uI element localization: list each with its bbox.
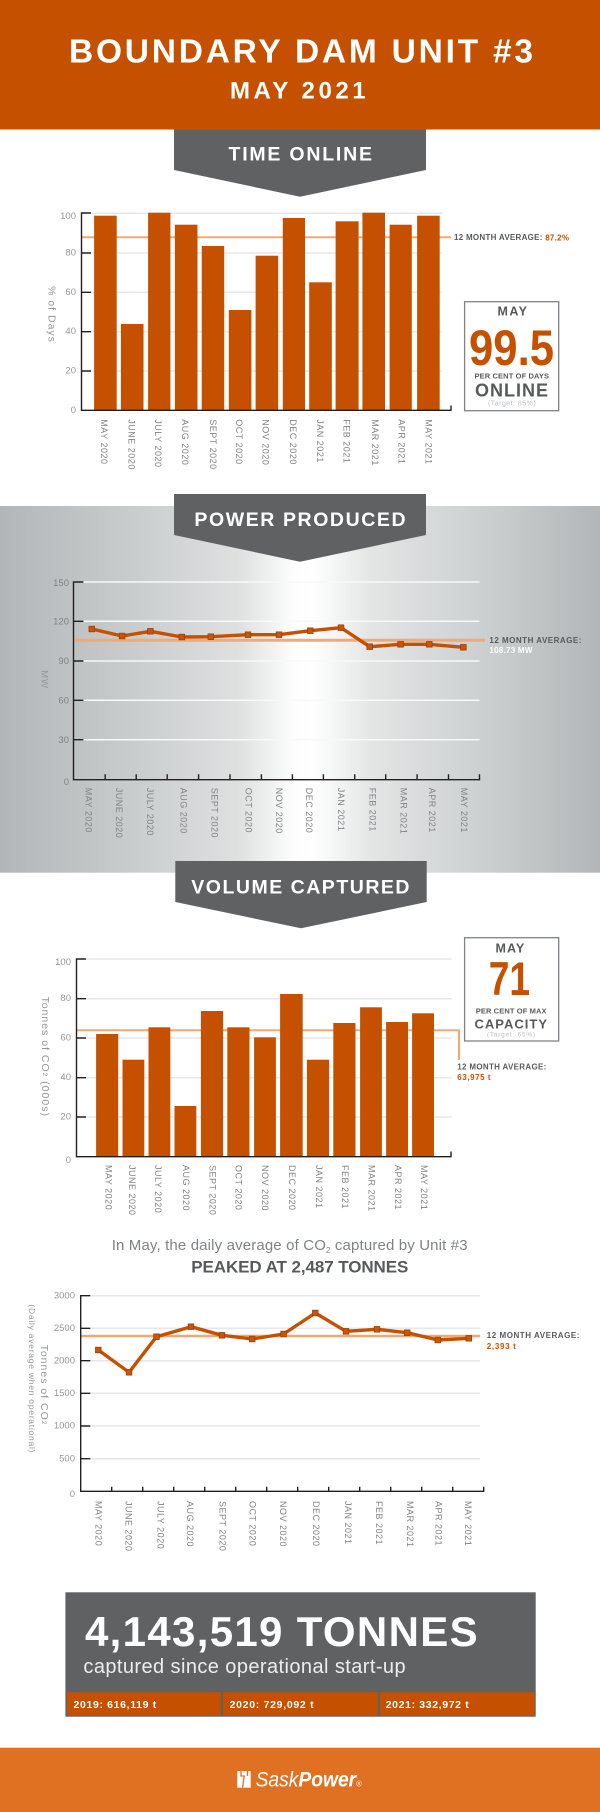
bar chart: time online: 40 <box>65 326 76 337</box>
icon: saskpower logo mark <box>237 1771 251 1788</box>
bar chart: time online: MAY 2020 <box>99 419 109 465</box>
total figure: 4,143,519 TONNES <box>85 1608 478 1655</box>
line chart: daily average captured: MAY 2021 <box>463 1501 473 1546</box>
section heading: power produced: POWER PRODUCED <box>194 509 406 531</box>
text block: daily average peak: captured by Unit #3 <box>331 1237 468 1254</box>
line chart: daily average captured: DEC 2020 <box>311 1501 321 1547</box>
line chart: daily average captured: 2000 <box>54 1356 75 1366</box>
line chart: power produced: NOV 2020 <box>274 788 284 834</box>
line chart: power produced: SEPT 2020 <box>209 788 219 838</box>
bar chart: volume captured: 60 <box>60 1032 71 1044</box>
line chart: power produced: 120 <box>53 616 69 628</box>
line chart: daily average captured: JULY 2020 <box>155 1501 165 1549</box>
section heading: time online <box>174 130 426 197</box>
bar chart: volume captured: AUG 2020 <box>181 1165 191 1211</box>
line chart: power produced: JAN 2021 <box>336 788 346 831</box>
bar chart: volume captured: DEC 2020 <box>287 1165 297 1211</box>
yearly totals strip <box>67 1692 535 1716</box>
line chart: daily average captured: FEB 2021 <box>374 1501 384 1545</box>
bar chart: time online: SEPT 2020 <box>208 419 218 470</box>
bar chart: time online: APR 2021 <box>396 419 406 464</box>
average label: power produced: 12 MONTH AVERAGE: <box>489 636 581 645</box>
line chart: power produced: MAY 2020 <box>83 788 93 833</box>
footer band <box>0 1748 600 1812</box>
panel: total tonnes captured <box>65 1592 536 1717</box>
line chart: power produced: 30 <box>58 735 69 746</box>
bar chart: time online: 20 <box>65 366 76 376</box>
line chart: power produced: MAY 2021 <box>459 788 469 833</box>
line chart: daily average captured: Tonnes of CO 2 <box>38 1345 50 1425</box>
bar chart: volume captured: SEPT 2020 <box>207 1165 217 1215</box>
bar chart: time online: FEB 2021 <box>342 419 352 463</box>
text block: daily average peak: In May, the daily average of CO <box>112 1237 326 1254</box>
header banner <box>0 0 600 130</box>
callout: 71 per cent of max capacity: PER CENT OF MAX <box>476 1006 546 1015</box>
callout: 71 per cent of max capacity: 71 <box>489 952 530 1005</box>
bar chart: time online: 80 <box>65 248 76 258</box>
bar chart: time online: 60 <box>65 287 76 298</box>
line chart: daily average captured: 1000 <box>54 1420 75 1432</box>
bar chart: time online: DEC 2020 <box>288 419 298 465</box>
bar chart: volume captured: Tonnes of CO 2 (000s) <box>39 996 51 1117</box>
bar chart: volume captured: 0 <box>66 1155 71 1166</box>
line chart: power produced: MAR 2021 <box>399 788 409 834</box>
line chart: power produced: DEC 2020 <box>304 788 314 833</box>
yearly totals strip: 2020: 729,092 t <box>230 1699 314 1711</box>
bar chart: volume captured: JAN 2021 <box>314 1165 324 1209</box>
average label: volume captured <box>457 1062 546 1082</box>
bar chart: volume captured: FEB 2021 <box>340 1165 350 1209</box>
line chart: power produced: APR 2021 <box>427 788 437 833</box>
line chart: power produced: MW <box>38 670 50 689</box>
bar chart: volume captured: 100 <box>55 957 71 968</box>
line chart: daily average captured: 2500 <box>54 1323 75 1334</box>
section heading: time online: TIME ONLINE <box>228 144 372 166</box>
bar chart: time online: MAR 2021 <box>370 419 380 466</box>
callout: 99.5 per cent online: (Target: 85%) <box>488 400 536 407</box>
bar chart: volume captured: MAY 2020 <box>103 1165 113 1210</box>
line chart: daily average captured: AUG 2020 <box>185 1501 195 1547</box>
average label: volume captured: 63,975 t <box>457 1073 491 1082</box>
bar chart: volume captured: NOV 2020 <box>260 1165 270 1211</box>
callout: 71 per cent of max capacity: CAPACITY <box>474 1016 547 1031</box>
line chart: daily average captured: MAY 2020 <box>93 1501 103 1546</box>
line chart: daily average captured: OCT 2020 <box>248 1501 258 1546</box>
line chart: power produced: OCT 2020 <box>244 788 254 833</box>
text block: daily average peak: PEAKED AT 2,487 TONNES <box>191 1257 408 1276</box>
logo wordmark: SaskPower® <box>256 1769 362 1792</box>
callout: 99.5 per cent online: MAY <box>498 305 528 319</box>
line chart: power produced: FEB 2021 <box>367 788 377 832</box>
callout: 99.5 per cent online: ONLINE <box>475 381 548 401</box>
bar chart: volume captured: OCT 2020 <box>233 1165 243 1210</box>
bar chart: volume captured: 80 <box>60 993 71 1004</box>
line chart: daily average captured: (Daily average when operational) <box>27 1304 37 1453</box>
line chart: power produced <box>38 578 485 838</box>
line chart: daily average captured <box>27 1290 484 1552</box>
line chart: daily average captured: SEPT 2020 <box>218 1501 228 1551</box>
bar chart: time online <box>46 211 451 470</box>
bar chart: time online: JUNE 2020 <box>126 419 136 470</box>
yearly totals strip: 2021: 332,972 t <box>386 1699 469 1711</box>
average label: time online: 12 MONTH AVERAGE: 87.2% <box>454 233 569 242</box>
line chart: daily average captured: NOV 2020 <box>278 1501 288 1547</box>
subtitle date: MAY 2021 <box>230 77 366 104</box>
callout: 71 per cent of max capacity: MAY <box>496 942 525 956</box>
line chart: power produced: 60 <box>58 696 69 706</box>
text block: daily average peak: 2 <box>326 1246 331 1255</box>
bar chart: volume captured: MAR 2021 <box>367 1165 377 1212</box>
line chart: power produced: 150 <box>53 578 69 589</box>
section heading: power produced <box>174 494 426 562</box>
bar chart: time online: MAY 2021 <box>424 419 434 465</box>
bar chart: volume captured: MAY 2021 <box>419 1165 429 1210</box>
bar chart: time online: NOV 2020 <box>261 419 271 465</box>
line chart: daily average captured: 500 <box>59 1454 75 1464</box>
line chart: power produced: JUNE 2020 <box>114 788 124 838</box>
callout: 71 per cent of max capacity <box>465 938 559 1041</box>
bar chart: volume captured: APR 2021 <box>393 1165 403 1210</box>
bar chart: volume captured <box>39 957 459 1216</box>
bar chart: time online: OCT 2020 <box>234 419 244 465</box>
bar chart: time online: 100 <box>60 211 76 222</box>
line chart: daily average captured: 1500 <box>54 1388 75 1399</box>
line chart: daily average captured: APR 2021 <box>434 1501 444 1546</box>
line chart: daily average captured: MAR 2021 <box>405 1501 415 1548</box>
section heading: volume captured <box>175 861 427 928</box>
average label: volume captured: 12 MONTH AVERAGE: <box>457 1062 546 1072</box>
average label: daily average <box>487 1331 579 1351</box>
bar chart: time online: AUG 2020 <box>180 419 190 465</box>
bar chart: time online: JAN 2021 <box>315 419 325 463</box>
bar chart: time online: JULY 2020 <box>153 419 163 468</box>
bar chart: time online: % of Days <box>46 286 58 343</box>
bar chart: volume captured: JUNE 2020 <box>127 1165 137 1216</box>
line chart: daily average captured: JAN 2021 <box>343 1501 353 1545</box>
section heading: volume captured: VOLUME CAPTURED <box>191 876 410 898</box>
line chart: power produced: 0 <box>64 777 69 788</box>
panel: power produced background <box>0 506 600 873</box>
bar chart: time online: 0 <box>71 405 76 416</box>
line chart: daily average captured: JUNE 2020 <box>124 1501 134 1552</box>
line chart: power produced: JULY 2020 <box>145 788 155 836</box>
average label: power produced <box>489 636 581 655</box>
bar chart: volume captured: JULY 2020 <box>153 1165 163 1213</box>
callout: 99.5 per cent online <box>465 302 559 411</box>
callout: 99.5 per cent online: PER CENT OF DAYS <box>474 371 549 380</box>
line chart: daily average captured: 3000 <box>54 1290 75 1302</box>
text block: daily average peak <box>112 1237 468 1276</box>
average label: power produced: 108.73 MW <box>489 646 533 655</box>
line chart: power produced: AUG 2020 <box>179 788 189 834</box>
average label: daily average: 12 MONTH AVERAGE: <box>487 1331 579 1340</box>
caption: captured since operational start-up <box>83 1656 406 1678</box>
title: BOUNDARY DAM UNIT #3 <box>69 34 533 71</box>
line chart: daily average captured: 0 <box>70 1489 75 1500</box>
average label: daily average: 2,393 t <box>487 1342 516 1351</box>
bar chart: volume captured: 40 <box>60 1072 71 1083</box>
callout: 71 per cent of max capacity: (Target: 65%) <box>487 1032 535 1038</box>
bar chart: volume captured: 20 <box>60 1112 71 1122</box>
callout: 99.5 per cent online: 99.5 <box>469 320 554 376</box>
yearly totals strip: 2019: 616,119 t <box>74 1699 157 1711</box>
line chart: power produced: 90 <box>58 656 69 667</box>
